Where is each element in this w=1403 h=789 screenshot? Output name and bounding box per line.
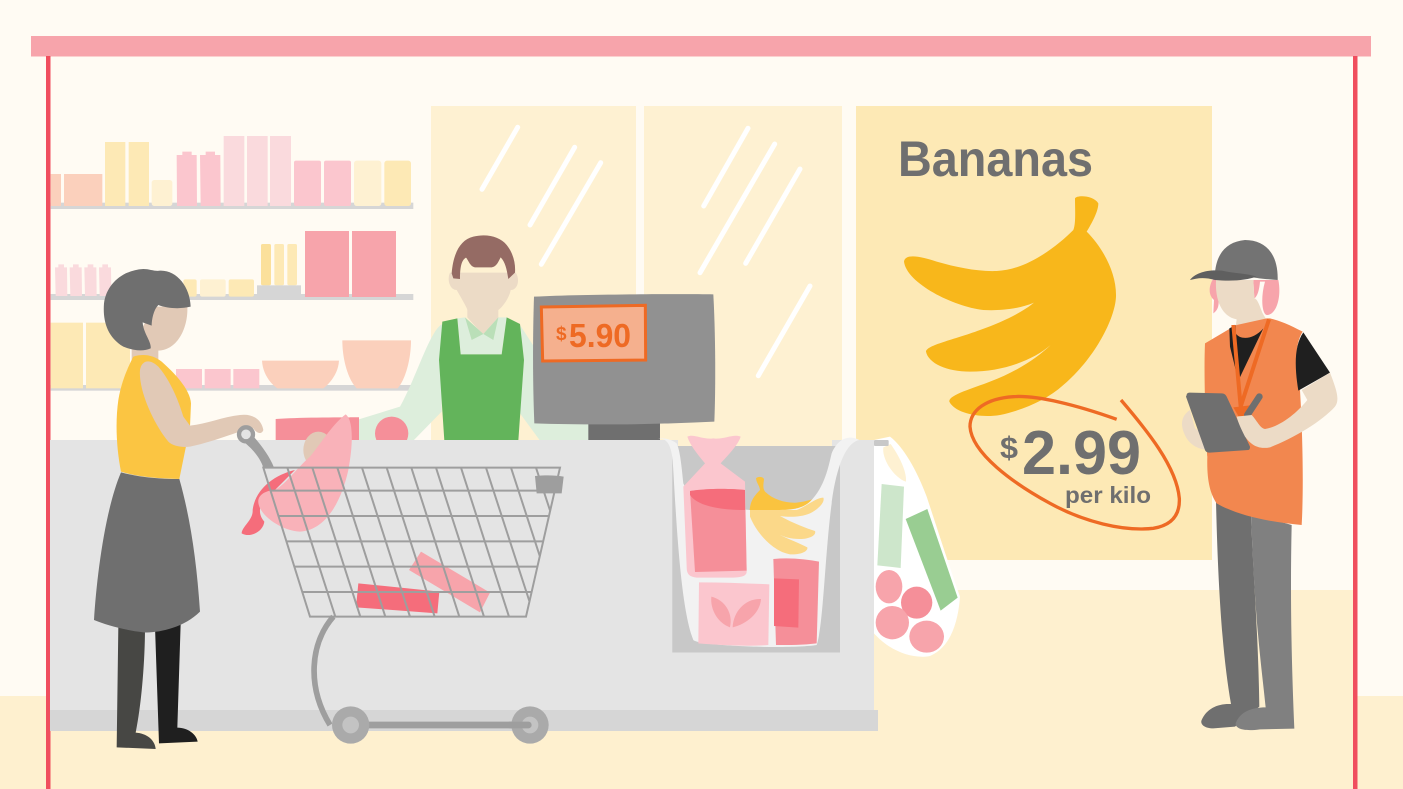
apple: [375, 417, 408, 450]
poster heading: Bananas: [898, 131, 1093, 187]
banana bunch in bag, upper part: [750, 476, 812, 510]
item on the till: [350, 417, 359, 441]
clipboard: [1186, 393, 1250, 453]
display price: 5.90: [569, 317, 631, 354]
banana price: $: [1000, 430, 1018, 465]
arm: [140, 361, 263, 447]
net shopping bag: [874, 437, 960, 657]
price display: [541, 305, 646, 361]
customer: [94, 269, 263, 749]
display price: $: [556, 324, 567, 345]
price circle annotation: [970, 396, 1179, 529]
banana price: per kilo: [1065, 482, 1151, 508]
lanyard and badge: [1233, 319, 1269, 416]
right arm: [1237, 373, 1337, 448]
cash register monitor: [533, 294, 715, 441]
shopping cart: [239, 414, 564, 744]
left hand: [1182, 410, 1212, 450]
shop windows: [431, 106, 842, 446]
cashier: [350, 235, 590, 450]
wire basket: [263, 468, 560, 617]
cart clasp: [535, 475, 564, 493]
bread loaf: [683, 436, 747, 578]
store worker: [1182, 240, 1337, 730]
cart contents: [242, 414, 490, 613]
banana price: 2.99: [1022, 419, 1141, 488]
banana bunch: [750, 498, 824, 554]
bag contents: [877, 484, 904, 568]
leaf package: [698, 582, 769, 646]
legs: [1201, 502, 1294, 730]
cart legs and wheels: [314, 617, 549, 744]
panel: bananas price poster: [856, 106, 1212, 560]
head and neck: [132, 307, 187, 360]
red carton: [773, 558, 819, 645]
checkout counter: [50, 440, 878, 731]
translucent bag: [655, 438, 859, 647]
icon: banana bunch: [904, 196, 1116, 416]
store shelves with products: [51, 136, 413, 391]
pen: [1247, 397, 1259, 415]
upper body: [1182, 240, 1337, 525]
skirt: [94, 472, 200, 632]
yellow top: [117, 355, 191, 479]
red box being scanned: [276, 417, 359, 442]
banana price: [1000, 419, 1151, 508]
handle: [239, 427, 274, 468]
legs: [117, 627, 156, 749]
cap: [1190, 240, 1278, 281]
paper grocery bag with groceries: [655, 436, 859, 647]
